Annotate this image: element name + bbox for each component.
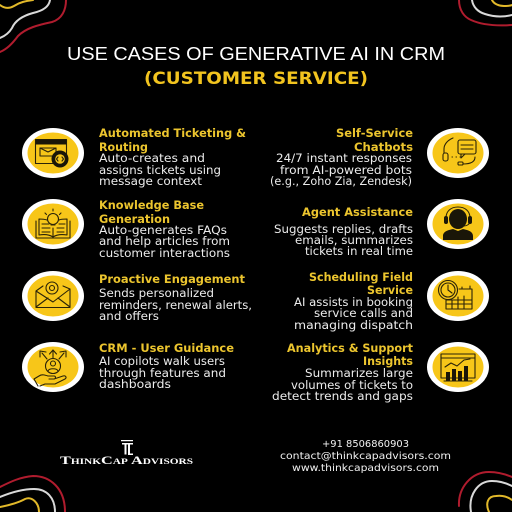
- description: volumes of tickets to: [291, 378, 413, 392]
- heading: Insights: [363, 354, 413, 368]
- decorative curves: bottom right: [459, 472, 512, 512]
- description: [270, 151, 412, 188]
- heading: Scheduling Field: [309, 270, 413, 284]
- description: and help articles from: [99, 234, 230, 248]
- description: Suggests replies, drafts: [274, 222, 413, 236]
- icon: support agent silhouette: [427, 199, 489, 249]
- panel: analytics and support insights: [272, 341, 489, 403]
- heading: Proactive Engagement: [99, 272, 245, 286]
- decorative curves: bottom left: [0, 476, 65, 512]
- description: reminders, renewal alerts,: [99, 298, 252, 312]
- heading: Self-Service: [336, 126, 413, 140]
- panel: proactive engagement: [22, 271, 252, 323]
- contact details: +91 8506860903: [322, 439, 409, 450]
- heading: CRM - User Guidance: [99, 341, 234, 355]
- panel: knowledge base generation: [22, 198, 230, 260]
- panel: self-service chatbots: [270, 126, 489, 188]
- icon: open book with light bulb: [22, 199, 84, 249]
- description: [99, 223, 230, 260]
- panel: scheduling field service: [294, 270, 489, 332]
- heading: Service: [367, 283, 413, 297]
- title: USE CASES OF GENERATIVE AI IN CRM: [67, 43, 445, 64]
- description: dashboards: [99, 377, 171, 391]
- description: [294, 295, 413, 332]
- description: managing dispatch: [294, 318, 413, 332]
- description: [274, 222, 413, 258]
- panel: agent assistance: [274, 199, 489, 258]
- description: and offers: [99, 309, 159, 323]
- heading: [287, 341, 413, 368]
- decorative curves: top left: [0, 0, 66, 52]
- description: [99, 286, 252, 323]
- heading: [309, 270, 413, 297]
- icon: ticketing window and gear: [22, 128, 84, 178]
- description: [99, 151, 221, 188]
- description: tickets in real time: [305, 244, 413, 258]
- description: message context: [99, 174, 202, 188]
- description: (e.g., Zoho Zia, Zendesk): [270, 174, 412, 188]
- description: 24/7 instant responses: [276, 151, 412, 165]
- heading: [99, 126, 246, 154]
- heading: Automated Ticketing &: [99, 126, 246, 140]
- icon: envelope with at sign: [22, 271, 84, 321]
- heading: Generation: [99, 212, 170, 226]
- icon: dashboard window with chart: [427, 342, 489, 392]
- subtitle: (CUSTOMER SERVICE): [144, 69, 368, 89]
- description: Sends personalized: [99, 286, 214, 300]
- panel: CRM user guidance: [22, 341, 234, 392]
- contact details: www.thinkcapadvisors.com: [292, 463, 439, 474]
- description: detect trends and gaps: [272, 389, 413, 403]
- description: [272, 366, 413, 403]
- description: AI assists in booking: [294, 295, 413, 309]
- description: Summarizes large: [305, 366, 413, 380]
- heading: [336, 126, 413, 154]
- description: [99, 354, 226, 391]
- icon: hand holding user with arrows: [22, 342, 84, 392]
- description: service calls and: [314, 306, 413, 320]
- contact details: [280, 439, 451, 474]
- heading: Routing: [99, 140, 148, 154]
- description: AI copilots walk users: [99, 354, 225, 368]
- contact details: contact@thinkcapadvisors.com: [280, 451, 451, 462]
- heading: [99, 198, 204, 226]
- description: assigns tickets using: [99, 163, 221, 177]
- description: from AI-powered bots: [280, 163, 412, 177]
- logo wordmark: ThinkCap Advisors: [60, 455, 194, 467]
- panel: automated ticketing and routing: [22, 126, 246, 188]
- heading: Chatbots: [354, 140, 413, 154]
- heading: Agent Assistance: [302, 205, 413, 219]
- heading: Analytics & Support: [287, 341, 413, 355]
- description: through features and: [99, 366, 226, 380]
- logo: ThinkCap Advisors: [60, 440, 194, 467]
- icon: clock and calendar: [427, 271, 489, 321]
- description: emails, summarizes: [295, 233, 413, 247]
- icon: TC monogram: [121, 440, 133, 455]
- description: Auto-generates FAQs: [99, 223, 227, 237]
- icon: headset and chat bubble: [427, 128, 489, 178]
- description: Auto-creates and: [99, 151, 205, 165]
- heading: Knowledge Base: [99, 198, 204, 212]
- decorative curves: top right: [459, 0, 512, 25]
- description: customer interactions: [99, 246, 230, 260]
